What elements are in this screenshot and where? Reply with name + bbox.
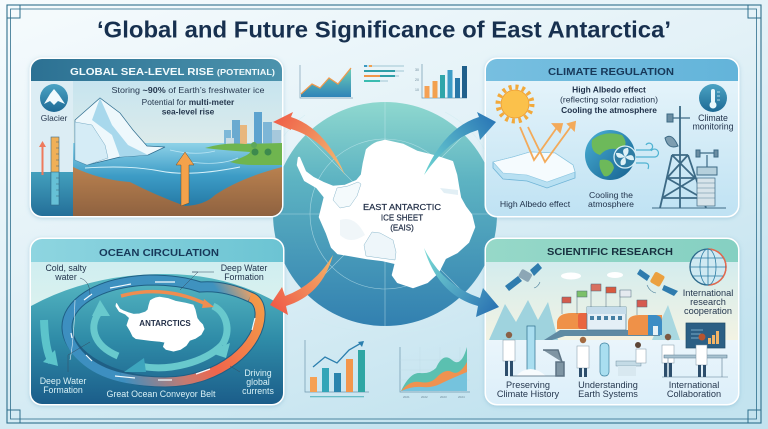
flags [562, 284, 647, 315]
text blocks: circulation: currents [242, 386, 274, 396]
text blocks: circulation: Driving [244, 368, 272, 378]
text block: storage: sea-level rise [162, 106, 215, 116]
inner ring [94, 306, 227, 368]
text block: storage: Storing ~90% of Earth’s freshwater ice [112, 85, 265, 95]
icon: globe network [690, 249, 726, 285]
mini chart: top right bars [415, 64, 467, 98]
panel: global sea-level rise [31, 59, 282, 216]
text blocks: circulation: global [246, 377, 270, 387]
text blocks: research: cooperation [684, 306, 732, 316]
mini chart: bottom right area: 2023 [440, 395, 447, 399]
text blocks: climate: Cooling the atmosphere [561, 105, 657, 115]
icon: sun [498, 87, 532, 121]
icon: earth with fan [585, 130, 658, 180]
mini chart: bottom right area: 2024 [458, 395, 465, 399]
icon: glacier: Glacier [41, 113, 67, 123]
text blocks: research: Earth Systems [578, 389, 638, 399]
mini chart: bottom right area [400, 347, 470, 399]
text blocks: research [497, 288, 733, 399]
arrow: to climate regulation [424, 112, 496, 175]
label: EAIS: EAST ANTARCTIC [363, 203, 441, 212]
label: EAIS [363, 203, 441, 232]
glacier [75, 98, 165, 165]
text block: storage [112, 85, 265, 116]
text blocks: climate: High Albedo effect [572, 84, 646, 94]
text blocks: circulation: water [54, 272, 77, 282]
mini chart: top right bars: 20 [415, 78, 419, 82]
text blocks: climate: atmosphere [588, 199, 634, 209]
map: East Antarctic ice sheet [298, 141, 474, 287]
text blocks: research: Climate History [497, 389, 560, 399]
text blocks: climate: Climate [698, 113, 728, 123]
text blocks: research: Understanding [578, 380, 638, 390]
clouds [561, 272, 581, 280]
icon: weather tower [652, 106, 726, 208]
arrow: level up [39, 141, 46, 175]
research station [557, 313, 581, 329]
text blocks: circulation: Great Ocean Conveyor Belt [106, 389, 216, 399]
green land and city [224, 130, 231, 144]
mountains [489, 300, 558, 340]
text blocks: circulation: Deep Water [40, 376, 86, 386]
panel heading: OCEAN CIRCULATION [99, 247, 219, 259]
text blocks: research: Preserving [506, 380, 550, 390]
conveyor belt ring [67, 280, 260, 382]
arrow: to sea-level rise [273, 112, 345, 175]
callout lines [68, 272, 240, 372]
arrow: to scientific research [424, 248, 499, 317]
panel: climate regulation [486, 59, 738, 216]
text blocks: circulation: Formation [224, 272, 264, 282]
panel heading: CLIMATE REGULATION [548, 66, 674, 78]
label: EAIS: (EAIS) [390, 224, 414, 232]
icon: glacier [40, 84, 68, 123]
central polar globe [273, 102, 497, 332]
text blocks: climate: Cooling the [589, 190, 633, 200]
flow arrows [71, 282, 255, 380]
text blocks: research: International [683, 288, 733, 298]
text blocks: climate: monitoring [692, 122, 734, 132]
arrow: rising sea level [176, 152, 194, 206]
panel heading: GLOBAL SEA-LEVEL RISE (POTENTIAL) [70, 66, 275, 78]
water [73, 143, 282, 216]
panel heading: SCIENTIFIC RESEARCH [547, 246, 673, 258]
text blocks: circulation [40, 263, 274, 399]
icon: thermometer [699, 84, 727, 112]
ruler gauge [51, 137, 59, 205]
text block: storage: Potential for multi-meter [142, 97, 235, 107]
mini chart: top right bars: 30 [415, 68, 419, 72]
text blocks: climate [500, 84, 734, 209]
text blocks: research: International [669, 380, 719, 390]
arrow: to ocean circulation [270, 255, 333, 315]
ground [73, 167, 282, 216]
mini chart: top right bars: 10 [415, 88, 419, 92]
text blocks: research: research [690, 297, 726, 307]
title: ‘Global and Future Significance of East Antarctica’ [97, 16, 671, 42]
text blocks: research: Collaboration [667, 389, 721, 399]
ocean [31, 274, 283, 404]
text blocks: circulation: ANTARCTICS [139, 319, 191, 328]
text blocks: climate: (reflecting solar radiation) [560, 94, 658, 104]
text blocks: circulation: Cold, salty [45, 263, 87, 273]
arrows: reflected radiation [520, 122, 575, 162]
text blocks: circulation: Formation [43, 385, 83, 395]
satellites [505, 263, 542, 291]
text blocks: circulation: Deep Water [221, 263, 267, 273]
platform [544, 330, 660, 340]
mini chart: bottom right area: 2021 [403, 395, 410, 399]
panel: scientific research [486, 239, 738, 404]
panel: ocean circulation [31, 239, 283, 404]
mini chart: bottom left bars and line [305, 340, 369, 397]
mini chart: top left area [300, 65, 353, 98]
mini chart: bottom right area: 2022 [421, 395, 428, 399]
map: small Antarctica [116, 297, 204, 351]
scientists and lab equipment [503, 323, 728, 377]
mini chart: top middle bars [364, 65, 404, 82]
text blocks: climate: High Albedo effect [500, 199, 571, 209]
label: EAIS: ICE SHEET [381, 214, 423, 222]
ice floe [493, 152, 575, 188]
